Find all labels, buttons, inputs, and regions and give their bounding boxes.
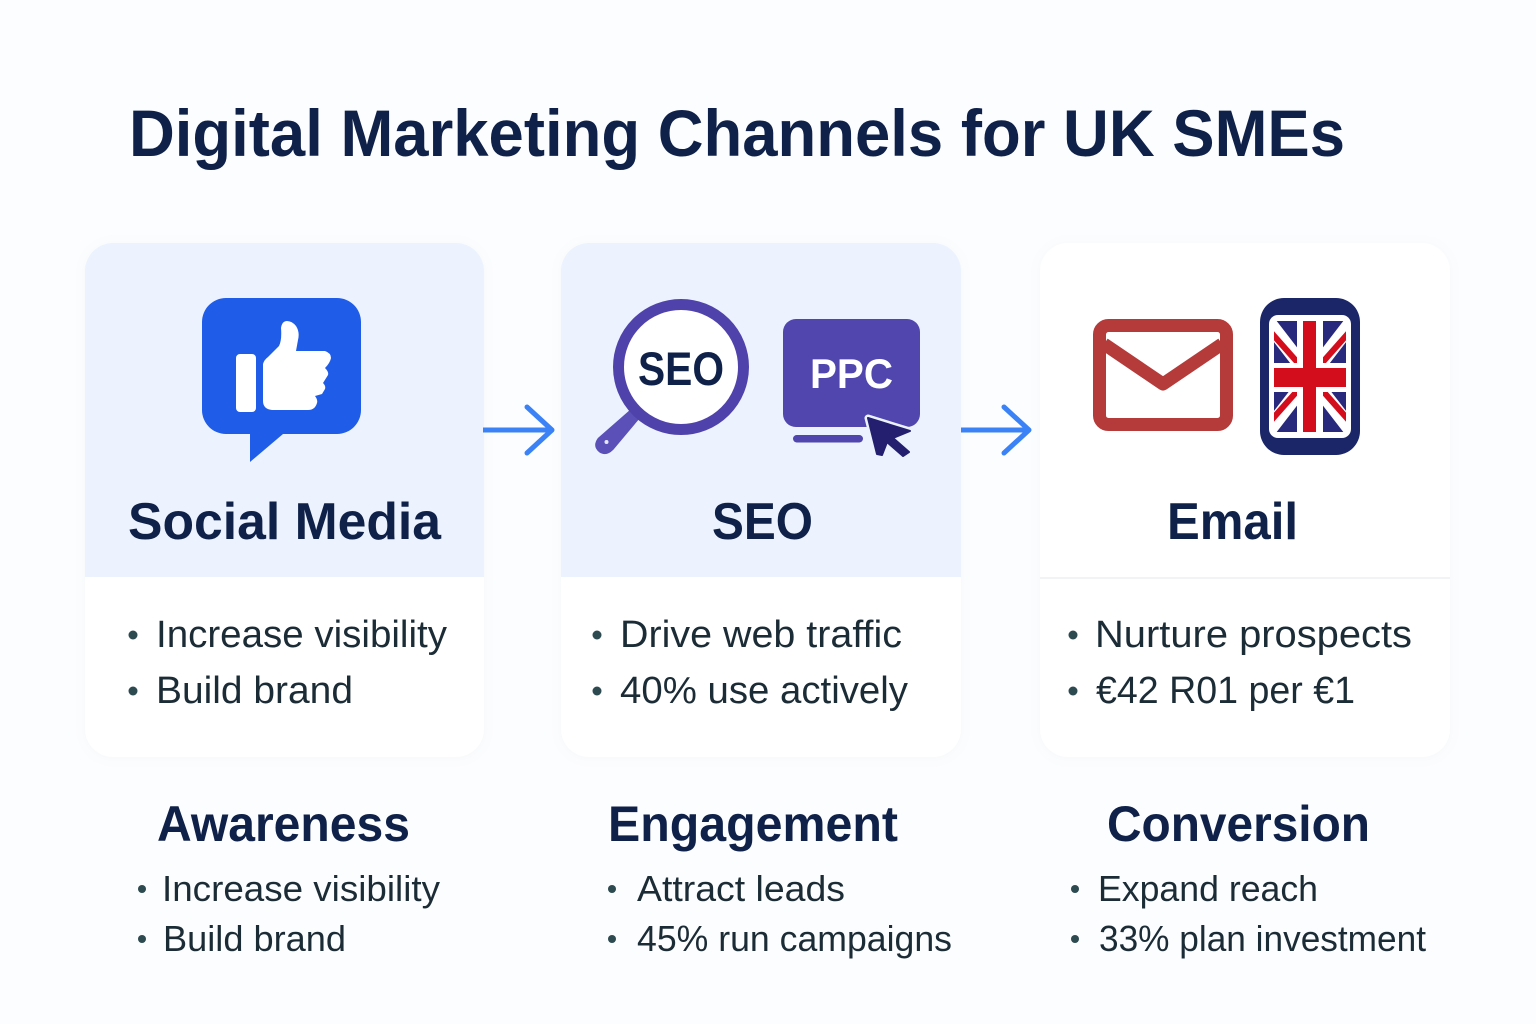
- icon: envelope: [1100, 326, 1226, 424]
- icon: PPC screen with cursor: [783, 319, 920, 456]
- bullet: attract leads: Attract leads: [637, 868, 845, 909]
- panel: email: [1040, 298, 1450, 711]
- arrow: social media to SEO: [483, 407, 552, 453]
- bullet: drive web traffic: Drive web traffic: [620, 614, 902, 656]
- panel: SEO: [561, 243, 961, 757]
- heading: email: Email: [1167, 493, 1298, 551]
- column: engagement: [608, 796, 952, 959]
- heading: social media: Social Media: [128, 493, 442, 551]
- bullet: build brand: Build brand: [163, 918, 346, 959]
- heading: SEO: SEO: [712, 493, 813, 551]
- arrow: SEO to email: [961, 407, 1029, 453]
- heading: conversion: Conversion: [1107, 796, 1370, 852]
- bullet: build brand: Build brand: [156, 670, 353, 712]
- icon: thumbs up speech bubble: [202, 298, 361, 462]
- column: awareness: [138, 796, 440, 959]
- bullet: 40% use actively: 40% use actively: [620, 670, 908, 712]
- panel: social media: [85, 243, 484, 757]
- column: conversion: [1071, 796, 1426, 959]
- icon: SEO magnifier: [597, 304, 744, 453]
- bullet: increase visibility: Increase visibility: [162, 868, 440, 909]
- heading: engagement: Engagement: [608, 796, 898, 852]
- icon: SEO magnifier: SEO: [638, 342, 724, 395]
- bullet: 45% run campaigns: 45% run campaigns: [637, 918, 952, 959]
- infographic canvas: [85, 108, 1450, 958]
- bullet: ROI per euro: €42 R01 per €1: [1096, 670, 1355, 712]
- icon: phone with UK flag: [1260, 298, 1360, 455]
- bullet: 33% plan investment: 33% plan investment: [1099, 918, 1426, 959]
- title: Digital Marketing Channels for UK SMEs: [129, 96, 1345, 170]
- heading: awareness: Awareness: [157, 796, 410, 852]
- bullet: increase visibility: Increase visibility: [156, 614, 447, 656]
- bullet: nurture prospects: Nurture prospects: [1095, 614, 1412, 656]
- bullet: expand reach: Expand reach: [1098, 868, 1318, 909]
- icon: PPC screen with cursor: PPC: [810, 350, 893, 397]
